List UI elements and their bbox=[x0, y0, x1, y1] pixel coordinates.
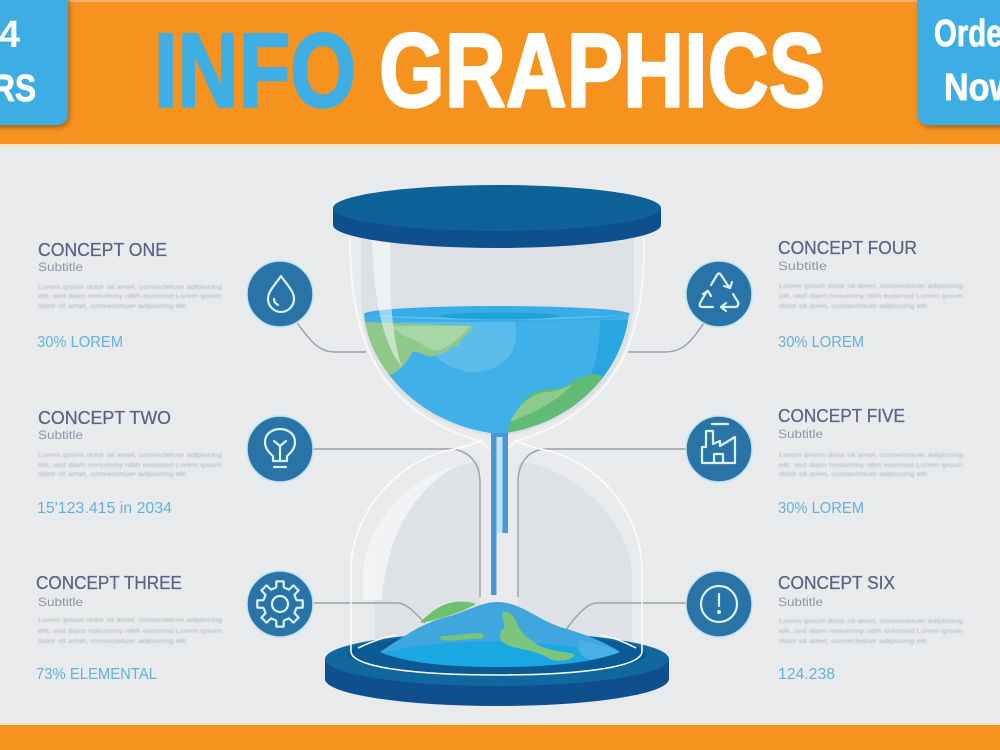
panel: concept six: elit, sed diam nonummy nibh euismod Lorem ipsum bbox=[779, 628, 963, 635]
icon: gear bbox=[247, 571, 313, 637]
panel: concept six: CONCEPT SIX bbox=[778, 573, 895, 593]
panel: concept two: CONCEPT TWO bbox=[38, 408, 171, 428]
panel: concept six: 124.238 bbox=[778, 666, 835, 683]
panel: concept two: Subtitle bbox=[38, 428, 83, 442]
base bbox=[325, 632, 669, 706]
panel: concept two: elit, sed diam nonummy nibh euismod Lorem ipsum bbox=[38, 462, 222, 469]
panel: concept four: CONCEPT FOUR bbox=[778, 238, 917, 258]
panel: concept one: Lorem ipsum dolor sit amet, consectetuer adipiscing bbox=[38, 284, 222, 291]
icon: factory bbox=[686, 416, 752, 482]
panel: concept five: CONCEPT FIVE bbox=[778, 406, 905, 426]
panel: concept four bbox=[778, 238, 963, 351]
panel: concept three: Subtitle bbox=[38, 595, 83, 609]
panel: concept five: elit, sed diam nonummy nibh euismod Lorem ipsum bbox=[779, 462, 963, 469]
panel: concept five: Subtitle bbox=[778, 427, 823, 441]
panel: concept five: Lorem ipsum dolor sit amet, consectetuer adipiscing bbox=[779, 452, 963, 459]
footer band bbox=[0, 723, 1000, 750]
panel: concept five bbox=[778, 406, 963, 517]
panel: concept four: elit, sed diam nonummy nibh euismod Lorem ipsum bbox=[779, 293, 963, 300]
panel: concept one bbox=[37, 240, 222, 351]
panel: concept four: Lorem ipsum dolor sit amet, consectetuer adipiscing bbox=[779, 283, 963, 290]
panel: concept three: 73% ELEMENTAL bbox=[36, 666, 157, 683]
panel: concept six: Subtitle bbox=[778, 595, 823, 609]
left badge bbox=[0, 0, 68, 125]
panel: concept three: dolor sit amet, consectetuer adipiscing elit. bbox=[38, 638, 188, 645]
glass rim bbox=[351, 440, 642, 675]
panel: concept one: CONCEPT ONE bbox=[38, 240, 167, 260]
panel: concept six bbox=[778, 573, 963, 683]
panel: concept one: 30% LOREM bbox=[37, 334, 123, 351]
panel: concept two: 15'123.415 in 2034 bbox=[37, 500, 172, 517]
panel: concept four: Subtitle bbox=[778, 259, 827, 273]
upper water with continents bbox=[364, 240, 640, 438]
icon: recycle arrows bbox=[686, 261, 752, 327]
panel: concept one: dolor sit amet, consectetuer adipiscing elit. bbox=[38, 303, 188, 310]
title bbox=[154, 13, 825, 130]
lower glass dome bbox=[363, 462, 632, 660]
panel: concept three: Lorem ipsum dolor sit amet, consectetuer adipiscing bbox=[38, 617, 222, 624]
icon: water drop bbox=[247, 261, 313, 327]
panel: concept one: elit, sed diam nonummy nibh euismod Lorem ipsum bbox=[38, 293, 222, 300]
water stream bbox=[491, 432, 508, 595]
panel: concept three bbox=[36, 573, 222, 683]
panel: concept four: dolor sit amet, consectetuer adipiscing elit. bbox=[779, 303, 929, 310]
panel: concept three: CONCEPT THREE bbox=[36, 573, 182, 593]
hourglass bbox=[297, 185, 704, 706]
panel: concept four: 30% LOREM bbox=[778, 334, 864, 351]
icon: exclamation mark bbox=[686, 571, 752, 637]
earth pile bbox=[380, 602, 625, 670]
panel: concept five: dolor sit amet, consectetuer adipiscing elit. bbox=[779, 471, 929, 478]
panel: concept two bbox=[37, 408, 222, 517]
title: GRAPHICS bbox=[379, 13, 825, 130]
panel: concept five: 30% LOREM bbox=[778, 500, 864, 517]
lid bbox=[333, 185, 661, 248]
title: INFO bbox=[154, 13, 356, 130]
upper glass bulb bbox=[350, 238, 644, 449]
panel: concept six: dolor sit amet, consectetuer adipiscing elit. bbox=[779, 638, 929, 645]
panel: concept one: Subtitle bbox=[38, 260, 83, 274]
right badge bbox=[917, 0, 1000, 125]
header band bbox=[0, 0, 1000, 147]
panel: concept six: Lorem ipsum dolor sit amet, consectetuer adipiscing bbox=[779, 618, 963, 625]
connector lines bbox=[297, 323, 704, 631]
icon: light bulb bbox=[247, 416, 313, 482]
panel: concept two: Lorem ipsum dolor sit amet, consectetuer adipiscing bbox=[38, 452, 222, 459]
panel: concept three: elit, sed diam nonummy nibh euismod Lorem ipsum bbox=[38, 628, 222, 635]
panel: concept two: dolor sit amet, consectetuer adipiscing elit. bbox=[38, 471, 188, 478]
